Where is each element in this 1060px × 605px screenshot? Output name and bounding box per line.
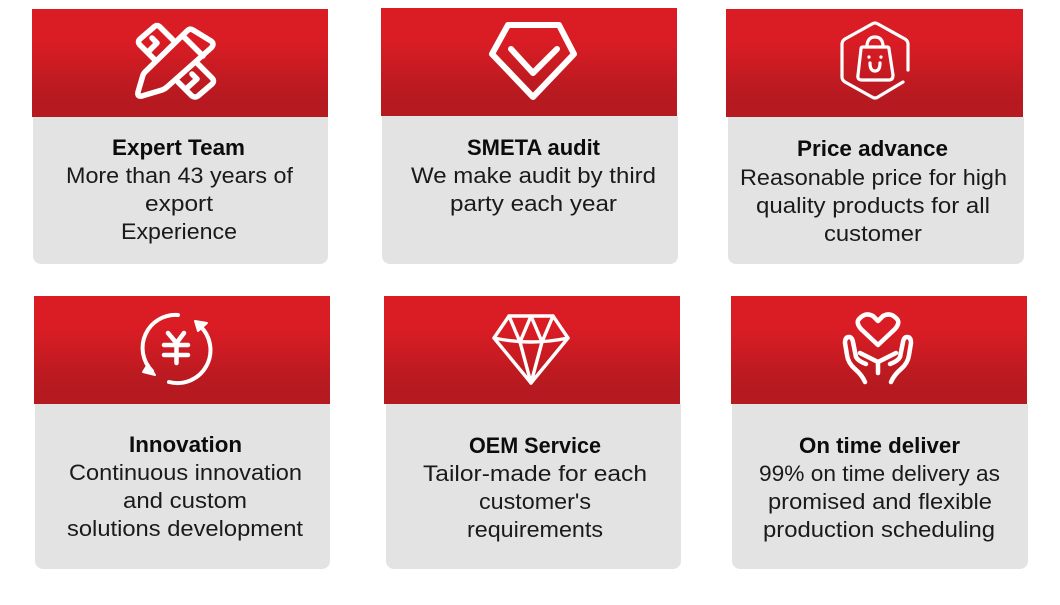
panel: On time deliver bbox=[731, 296, 1028, 569]
card body bbox=[33, 117, 328, 264]
icon: yen with circular arrows bbox=[143, 315, 210, 383]
card body bbox=[728, 117, 1024, 264]
description: We make audit by third bbox=[411, 163, 656, 188]
icon: pencil and ruler bbox=[138, 26, 214, 97]
icon: diamond bbox=[494, 316, 568, 383]
description: 99% on time delivery as bbox=[759, 461, 1000, 486]
description bbox=[759, 461, 1000, 542]
description: Experience bbox=[121, 219, 237, 244]
red header bbox=[726, 9, 1023, 117]
description: party each year bbox=[450, 191, 617, 216]
panel: Innovation bbox=[34, 296, 330, 569]
description bbox=[67, 460, 303, 541]
icon: hands holding heart bbox=[845, 314, 911, 382]
description: quality products for all bbox=[756, 193, 990, 218]
heading: Price advance bbox=[797, 136, 948, 161]
red header bbox=[731, 296, 1027, 404]
description: promised and flexible bbox=[768, 489, 992, 514]
red header bbox=[32, 9, 328, 117]
description: customer's bbox=[479, 489, 591, 514]
description bbox=[423, 461, 647, 542]
description bbox=[740, 165, 1007, 246]
description: production scheduling bbox=[763, 517, 995, 542]
description bbox=[411, 163, 656, 216]
icon: shopping bag in hexagon bbox=[842, 23, 908, 98]
card body bbox=[382, 116, 678, 264]
description: More than 43 years of bbox=[66, 163, 294, 188]
card body bbox=[35, 404, 330, 569]
description: Continuous innovation bbox=[69, 460, 302, 485]
description bbox=[66, 163, 294, 244]
card body bbox=[732, 404, 1028, 569]
description: and custom bbox=[123, 488, 247, 513]
description: Tailor-made for each bbox=[423, 461, 647, 486]
icon: gem with check bbox=[492, 25, 574, 97]
heading: On time deliver bbox=[799, 433, 960, 458]
panel: OEM Service bbox=[384, 296, 681, 569]
red header bbox=[384, 296, 680, 404]
red header bbox=[381, 8, 677, 116]
description: Reasonable price for high bbox=[740, 165, 1007, 190]
description: export bbox=[145, 191, 213, 216]
panel: SMETA audit bbox=[381, 8, 678, 264]
heading: Expert Team bbox=[112, 135, 245, 160]
description: customer bbox=[824, 221, 922, 246]
panel: Expert Team bbox=[32, 9, 328, 264]
card body bbox=[386, 404, 681, 569]
heading: Innovation bbox=[129, 432, 242, 457]
description: requirements bbox=[467, 517, 603, 542]
description: solutions development bbox=[67, 516, 303, 541]
heading: SMETA audit bbox=[467, 135, 601, 160]
heading: OEM Service bbox=[469, 433, 601, 458]
panel: Price advance bbox=[726, 9, 1024, 264]
red header bbox=[34, 296, 330, 404]
